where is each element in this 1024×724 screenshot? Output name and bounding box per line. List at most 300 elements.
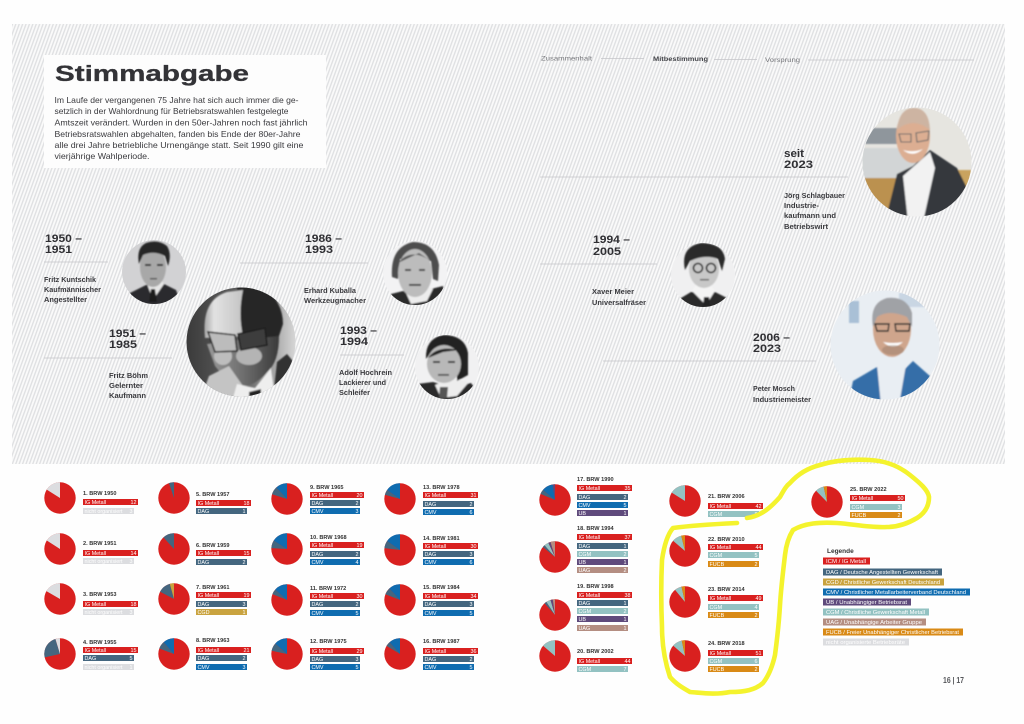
person: Fritz Böhm: 1951 –: [109, 328, 146, 340]
bars: 5: [356, 611, 358, 617]
bars: CMV: [424, 665, 437, 671]
pie: [669, 640, 701, 672]
person: Jörg Schlagbauer: kaufmann und: [784, 211, 836, 220]
person: Jörg Schlagbauer: 2023: [784, 159, 813, 171]
person: Erhard Kuballa: Werkzeugmacher: [304, 296, 366, 305]
chart: 16. BRW 1987: [384, 638, 478, 671]
bars: nicht organisiert: [84, 610, 123, 616]
person: Jörg Schlagbauer: Jörg Schlagbauer: [784, 191, 845, 200]
chart: 5. BRW 1957: 5. BRW 1957: [196, 492, 229, 498]
bars: nicht organisiert: [84, 559, 123, 565]
top navigation: Vorsprung: [765, 58, 800, 64]
person: Peter Mosch: 2006 –: [753, 332, 790, 344]
bars: [708, 595, 763, 619]
bars: UB: [578, 511, 586, 517]
pie: [539, 541, 571, 573]
chart: 6. BRW 1959: [158, 533, 251, 566]
bars: DAG: [198, 602, 209, 608]
portrait: Xaver Meier: [671, 243, 735, 309]
bars: 15: [130, 648, 136, 654]
bars: DAG: [578, 495, 590, 501]
bars: DAG: [424, 657, 436, 663]
bars: [83, 601, 138, 616]
top navigation: Zusammenhalt: [541, 56, 592, 62]
hatched background panel: [12, 24, 1005, 464]
bars: DAG: [312, 552, 323, 558]
chart: 11. BRW 1972: [271, 584, 364, 617]
bars: 3: [898, 505, 900, 511]
chart: 21. BRW 2006: 21. BRW 2006: [708, 494, 745, 500]
bars: 2: [624, 552, 626, 558]
bars: 42: [756, 504, 762, 510]
pie: [158, 482, 190, 514]
bars: 4: [356, 560, 358, 566]
person: Peter Mosch: Peter Mosch: [753, 384, 795, 393]
chart: 9. BRW 1965: [271, 483, 364, 515]
pie: [158, 638, 190, 670]
bars: CMV: [424, 560, 437, 566]
bars: 1: [624, 601, 626, 607]
bars: IG Metall: [84, 500, 106, 506]
bars: 38: [624, 593, 630, 599]
bars: 20: [356, 493, 362, 499]
bars: IG Metall: [424, 594, 446, 600]
bars: 30: [356, 594, 362, 600]
bars: 51: [756, 651, 762, 657]
chart: 25. BRW 2022: 25. BRW 2022: [850, 487, 887, 493]
bars: [83, 550, 138, 565]
bars: UAG: [578, 626, 590, 632]
bars: 5: [754, 553, 758, 559]
legend: Legende: [827, 548, 854, 555]
chart: 24. BRW 2018: 24. BRW 2018: [708, 641, 745, 647]
bars: DAG: [312, 602, 323, 608]
bars: [577, 534, 632, 574]
chart: 19. BRW 1998: [539, 584, 632, 632]
bars: 2: [470, 657, 472, 663]
bars: DAG: [84, 656, 96, 662]
person: Xaver Meier: [540, 234, 735, 309]
chart: 8. BRW 1963: 8. BRW 1963: [196, 638, 229, 644]
yellow highlighter outline: [661, 460, 929, 694]
chart: 4. BRW 1955: 4. BRW 1955: [83, 640, 116, 646]
bars: IG Metall: [424, 493, 446, 499]
legend: CGD / Christliche Gewerkschaft Deutschland: [826, 580, 940, 586]
chart: 9. BRW 1965: 9. BRW 1965: [310, 485, 343, 491]
bars: CGM: [710, 659, 723, 665]
bars: IG Metall: [198, 648, 219, 654]
bars: FUCB: [710, 613, 725, 619]
person: Erhard Kuballa: Erhard Kuballa: [304, 286, 357, 295]
chart: 22. BRW 2010: 22. BRW 2010: [708, 537, 745, 543]
bars: 2: [754, 613, 758, 619]
page number: 16 | 17: [943, 676, 964, 685]
bars: 1: [242, 509, 246, 515]
bars: 2: [624, 609, 626, 615]
bars: DAG: [424, 502, 436, 508]
bars: 2: [754, 667, 758, 673]
person: Fritz Kuntschik: 1951: [45, 244, 72, 256]
bars: IG Metall: [424, 649, 446, 655]
bars: IG Metall: [312, 594, 333, 600]
chart: 24. BRW 2018: [669, 640, 763, 673]
bars: 2: [242, 656, 246, 662]
person: Xaver Meier: Universalfräser: [592, 298, 646, 307]
pie: [384, 534, 416, 566]
bars: CGD: [198, 610, 210, 616]
pie: [384, 638, 416, 670]
bars: 3: [356, 509, 358, 515]
chart: 10. BRW 1968: 10. BRW 1968: [310, 535, 347, 541]
intro text: setzlich in der Wahlordnung für Betriebsratswahlen festgelegte: [54, 106, 289, 116]
bars: [708, 544, 763, 568]
bars: [577, 592, 632, 632]
bars: 2: [470, 502, 472, 508]
bars: 3: [242, 665, 246, 671]
chart: 12. BRW 1975: 12. BRW 1975: [310, 639, 347, 645]
chart: 10. BRW 1968: [271, 533, 364, 566]
bars: [310, 593, 364, 617]
person: Fritz Kuntschik: Kaufmännischer: [44, 285, 101, 294]
legend: CMV / Christlicher Metallarbeiterverband Deutschland: [826, 590, 966, 596]
person: Fritz Böhm: 1985: [109, 339, 137, 351]
legend: [823, 548, 970, 646]
chart: 8. BRW 1963: [158, 638, 251, 671]
bars: IG Metall: [710, 545, 731, 551]
legend: UB / Unabhängiger Betriebsrat: [826, 600, 907, 606]
bars: DAG: [312, 501, 323, 507]
person: Fritz Böhm: Fritz Böhm: [109, 371, 148, 380]
pie: [811, 486, 843, 518]
bars: 49: [756, 596, 762, 602]
chart: 2. BRW 1951: 2. BRW 1951: [83, 541, 116, 547]
bars: 21: [244, 648, 250, 654]
bars: 6: [470, 510, 472, 516]
portrait: Jörg Schlagbauer: [862, 107, 972, 222]
bars: [83, 499, 138, 515]
bars: CGM: [710, 512, 723, 518]
bars: 18: [130, 602, 136, 608]
bars: 5: [470, 665, 472, 671]
bars: IG Metall: [710, 504, 731, 510]
intro text: Amtszeit verändert. Wurden in den 50er-Jahren noch fast jährlich: [54, 118, 308, 128]
pie: [539, 484, 571, 516]
bars: 2: [356, 552, 358, 558]
bars: 3: [242, 602, 246, 608]
bars: CGM: [710, 553, 723, 559]
bars: [310, 492, 364, 515]
portrait: Peter Mosch: [830, 290, 940, 405]
pie: [669, 535, 701, 567]
bars: [423, 648, 478, 671]
bars: IG Metall: [710, 596, 731, 602]
bars: CMV: [312, 560, 324, 566]
chart: 1. BRW 1950: [44, 482, 138, 515]
chart: 13. BRW 1978: 13. BRW 1978: [423, 485, 460, 491]
pie: [158, 533, 190, 565]
chart: 18. BRW 1994: 18. BRW 1994: [577, 526, 614, 532]
bars: 4: [754, 605, 758, 611]
bars: IG Metall: [578, 593, 600, 599]
person: Fritz Böhm: Kaufmann: [109, 391, 146, 400]
person: Jörg Schlagbauer: Industrie-: [784, 201, 820, 210]
person: Peter Mosch: [603, 290, 940, 405]
bars: IG Metall: [312, 649, 333, 655]
person: Erhard Kuballa: 1986 –: [305, 233, 342, 245]
bars: 3: [356, 657, 358, 663]
bars: 3: [470, 552, 472, 558]
person: Adolf Hochrein: Lackierer und: [339, 378, 386, 387]
person: Jörg Schlagbauer: Betriebswirt: [784, 222, 828, 231]
pie: [44, 482, 76, 514]
chart: 7. BRW 1961: [158, 583, 251, 616]
bars: 5: [624, 503, 626, 509]
bars: DAG: [578, 601, 590, 607]
bars: 19: [244, 593, 250, 599]
bars: CMV: [312, 611, 324, 617]
chart: 23. BRW 2014: [669, 586, 763, 619]
chart: 11. BRW 1972: 11. BRW 1972: [310, 586, 346, 592]
bars: 18: [244, 501, 250, 507]
bars: [850, 495, 905, 519]
bars: [196, 500, 251, 515]
bars: 2: [624, 495, 626, 501]
person: Fritz Kuntschik: Angestellter: [44, 295, 87, 304]
chart: 16. BRW 1987: 16. BRW 1987: [423, 639, 460, 645]
bars: CMV: [312, 509, 324, 515]
legend: ICM / IG Metall: [826, 559, 866, 565]
bars: 3: [130, 509, 132, 515]
pie: [44, 533, 76, 565]
bars: 1: [242, 610, 246, 616]
bars: IG Metall: [424, 544, 446, 550]
bars: 2: [242, 560, 246, 566]
bars: 37: [624, 535, 630, 541]
bars: IG Metall: [578, 659, 600, 665]
heading: Stimmabgabe: [55, 61, 249, 86]
bars: [83, 647, 138, 671]
chart: 5. BRW 1957: [158, 482, 251, 515]
intro text: vierjährige Wahlperiode.: [54, 151, 150, 161]
bars: 3: [130, 559, 132, 565]
person: Adolf Hochrein: Adolf Hochrein: [339, 368, 392, 377]
bars: IG Metall: [312, 493, 333, 499]
bars: 50: [898, 496, 904, 502]
bars: [423, 543, 478, 566]
person: Xaver Meier: 1994 –: [593, 234, 630, 246]
person: Xaver Meier: Xaver Meier: [592, 287, 634, 296]
bars: UB: [578, 617, 586, 623]
bars: IG Metall: [84, 648, 106, 654]
legend: UAG / Unabhängige Arbeiter Gruppe: [826, 620, 922, 626]
chart: 15. BRW 1984: 15. BRW 1984: [423, 585, 460, 591]
bars: [577, 658, 632, 673]
bars: IG Metall: [312, 543, 333, 549]
chart: 17. BRW 1990: [539, 477, 632, 517]
bars: 29: [356, 649, 362, 655]
bars: IG Metall: [852, 496, 873, 502]
bars: 7: [624, 667, 626, 673]
pie: [271, 638, 303, 670]
bars: IG Metall: [578, 486, 600, 492]
chart: 1. BRW 1950: 1. BRW 1950: [83, 491, 116, 497]
bars: IG Metall: [578, 535, 600, 541]
intro text: Betriebsratswahlen abgehalten, fanden bis Ende der 80er-Jahre: [54, 129, 301, 139]
bars: DAG: [198, 656, 209, 662]
bars: DAG: [424, 602, 436, 608]
bars: 1: [624, 511, 626, 517]
bars: FUCB: [852, 513, 867, 519]
bars: 30: [470, 544, 476, 550]
chart: 22. BRW 2010: [669, 535, 763, 568]
pie: [158, 583, 190, 615]
pie: [384, 483, 416, 515]
bars: nicht organisiert: [84, 665, 123, 671]
person: Jörg Schlagbauer: [540, 107, 972, 231]
person: Erhard Kuballa: 1993: [305, 244, 333, 256]
chart: 12. BRW 1975: [271, 638, 364, 671]
bars: [577, 485, 632, 517]
bars: [708, 503, 763, 518]
intro text: Im Laufe der vergangenen 75 Jahre hat sich auch immer die ge-: [54, 95, 299, 105]
bars: FUCB: [710, 562, 725, 568]
bars: [196, 592, 251, 616]
chart: 13. BRW 1978: [384, 483, 478, 516]
bars: 44: [624, 659, 630, 665]
chart: 17. BRW 1990: 17. BRW 1990: [577, 477, 614, 483]
chart: 20. BRW 2002: 20. BRW 2002: [577, 649, 614, 655]
bars: 2: [898, 513, 900, 519]
bars: 8: [754, 512, 758, 518]
bars: 5: [130, 656, 132, 662]
bars: 6: [470, 560, 472, 566]
chart: 21. BRW 2006: [669, 485, 763, 518]
pie: [669, 485, 701, 517]
intro text: alle drei Jahre betriebliche Urnengänge statt. Seit 1990 gilt eine: [54, 140, 304, 150]
person: Fritz Böhm: Gelernter: [109, 381, 143, 390]
person: Jörg Schlagbauer: seit: [784, 148, 804, 160]
bars: CGM: [710, 605, 723, 611]
bars: [423, 492, 478, 516]
bars: 1: [624, 626, 626, 632]
bars: 3: [470, 602, 472, 608]
top navigation: [541, 56, 974, 64]
chart: 2. BRW 1951: [44, 533, 138, 565]
chart: 18. BRW 1994: [539, 526, 632, 574]
bars: IG Metall: [84, 602, 106, 608]
chart: 6. BRW 1959: 6. BRW 1959: [196, 543, 229, 549]
bars: [708, 650, 763, 673]
chart: 3. BRW 1953: 3. BRW 1953: [83, 592, 116, 598]
person: Adolf Hochrein: 1993 –: [340, 325, 377, 337]
portrait: Fritz Böhm: [186, 286, 297, 398]
bars: 35: [624, 486, 630, 492]
bars: 2: [754, 562, 758, 568]
bars: CGM: [852, 505, 865, 511]
top navigation: Mitbestimmung: [653, 57, 708, 63]
legend: nicht organisierte Betriebsräte: [826, 640, 905, 646]
person: Peter Mosch: Industriemeister: [753, 395, 811, 404]
bars: DAG: [312, 657, 323, 663]
person: Fritz Böhm: [44, 286, 297, 400]
bars: DAG: [198, 509, 209, 515]
bars: UB: [578, 560, 586, 566]
bars: 1: [624, 544, 626, 550]
person: Adolf Hochrein: Schleifer: [339, 388, 370, 397]
bars: CMV: [198, 665, 210, 671]
panel: intro: [44, 55, 326, 168]
bars: 44: [756, 545, 762, 551]
person: Fritz Kuntschik: [44, 233, 186, 306]
bars: 19: [356, 543, 362, 549]
chart: 3. BRW 1953: [44, 583, 138, 616]
bars: DAG: [578, 544, 590, 550]
bars: UAG: [578, 568, 590, 574]
bars: 6: [754, 659, 758, 665]
legend: DAG / Deutsche Angestellten Gewerkschaft: [826, 570, 938, 576]
person: Erhard Kuballa: [240, 233, 447, 307]
portrait: Erhard Kuballa: [383, 241, 447, 307]
bars: 2: [356, 501, 358, 507]
bars: DAG: [424, 552, 436, 558]
bars: CMV: [578, 503, 591, 509]
bars: IG Metall: [710, 651, 731, 657]
pie: [44, 583, 76, 615]
portrait: Adolf Hochrein: [415, 335, 479, 401]
pie: [539, 640, 571, 672]
bars: DAG: [198, 560, 209, 566]
chart: 4. BRW 1955: [44, 638, 138, 671]
pie: [44, 638, 76, 670]
bars: [196, 647, 251, 671]
bars: 3: [130, 610, 132, 616]
person: Adolf Hochrein: [339, 325, 479, 401]
bars: 1: [130, 665, 132, 671]
legend: CGM / Christliche Gewerkschaft Metall: [826, 610, 925, 616]
person: Xaver Meier: 2005: [593, 246, 621, 258]
pie: [271, 584, 303, 616]
portrait: Fritz Kuntschik: [122, 240, 186, 306]
bars: IG Metall: [198, 501, 219, 507]
bars: IG Metall: [198, 551, 219, 557]
bars: 31: [470, 493, 476, 499]
bars: [423, 593, 478, 617]
pie: [384, 584, 416, 616]
chart: 15. BRW 1984: [384, 584, 478, 617]
bars: nicht organisiert: [84, 509, 123, 515]
bars: CGM: [578, 667, 592, 673]
chart: 7. BRW 1961: 7. BRW 1961: [196, 585, 229, 591]
bars: CGM: [578, 552, 592, 558]
bars: 2: [624, 568, 626, 574]
chart: 14. BRW 1981: 14. BRW 1981: [423, 536, 460, 542]
pie: [271, 533, 303, 565]
person: Peter Mosch: 2023: [753, 343, 781, 355]
bars: 14: [130, 551, 136, 557]
chart: 19. BRW 1998: 19. BRW 1998: [577, 584, 614, 590]
pie: [271, 483, 303, 515]
bars: [310, 648, 364, 671]
chart: 14. BRW 1981: [384, 534, 478, 566]
bars: CMV: [312, 665, 324, 671]
bars: IG Metall: [84, 551, 106, 557]
bars: IG Metall: [198, 593, 219, 599]
legend: FUCB / Freier Unabhängiger Christlicher Betriebsrat: [826, 630, 959, 636]
bars: 34: [470, 594, 476, 600]
bars: 1: [624, 560, 626, 566]
bars: 2: [356, 602, 358, 608]
intro text: [54, 95, 308, 161]
